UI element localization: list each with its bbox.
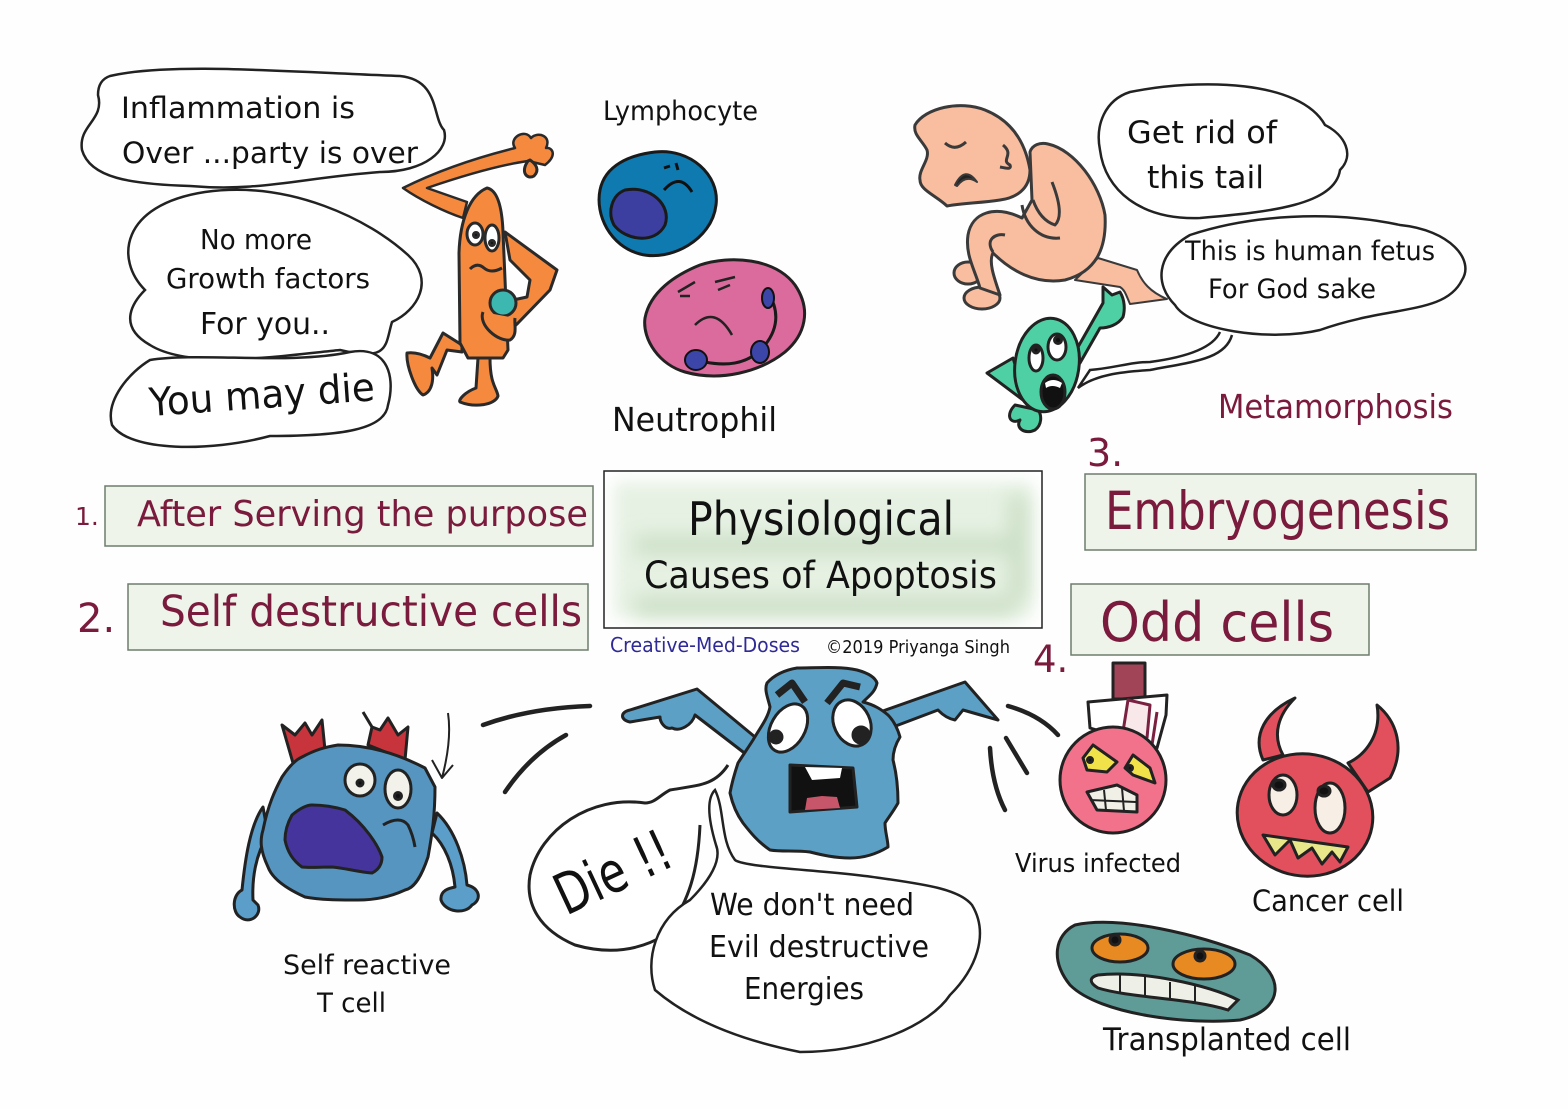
speech bubble: evil energies: We don't need — [710, 888, 914, 923]
speech bubble: growth factors — [128, 190, 422, 359]
speech bubble: growth factors: For you.. — [200, 307, 330, 342]
speech bubble: you may die: You may die — [147, 365, 376, 426]
character: virus infected cell — [1060, 663, 1167, 833]
speech bubble: growth factors: No more — [200, 223, 312, 256]
label: transplanted cell: Transplanted cell — [1102, 1022, 1351, 1058]
heading 4: odd cells — [1033, 584, 1369, 681]
character: self reactive T cell — [234, 712, 478, 920]
title box — [604, 471, 1042, 628]
label: self reactive T cell: Self reactive — [283, 950, 451, 981]
speech bubble: evil energies: Evil destructive — [709, 930, 929, 965]
speech bubble: human fetus — [1078, 216, 1465, 388]
heading 2: self destructive cells: 2. — [77, 596, 115, 642]
credit: creative-med-doses: Creative-Med-Doses — [610, 633, 800, 657]
speech bubble: get rid of this tail: Get rid of — [1127, 115, 1278, 151]
character: fetus — [915, 106, 1167, 309]
speech bubble: you may die — [111, 351, 391, 447]
heading 3: embryogenesis: 3. — [1087, 431, 1123, 475]
label: self reactive T cell: T cell — [316, 988, 386, 1019]
title text: Physiological — [688, 492, 954, 546]
speech bubble: growth factors: Growth factors — [166, 262, 370, 295]
label: self reactive T cell — [283, 950, 451, 1019]
credit: copyright: ©2019 Priyanga Singh — [826, 637, 1010, 658]
heading 4: odd cells: Odd cells — [1100, 591, 1334, 654]
character: transplanted cell — [1057, 922, 1275, 1021]
speech bubble: die: Die !! — [544, 817, 682, 929]
character: neutrophil — [645, 260, 805, 376]
character: cancer cell — [1227, 698, 1398, 887]
label: cancer cell: Cancer cell — [1252, 884, 1404, 918]
character: orange cell — [403, 134, 557, 405]
character: lymphocyte — [599, 152, 716, 256]
title box: Causes of Apoptosis — [644, 554, 997, 597]
speech bubble: inflammation — [82, 69, 445, 187]
character: green cell — [987, 287, 1124, 432]
speech bubble: die — [529, 765, 728, 950]
heading 1: after serving the purpose: After Serving the purpose — [137, 494, 588, 535]
speech bubble: get rid of this tail — [1099, 84, 1347, 218]
speech bubble: human fetus: This is human fetus — [1184, 236, 1435, 267]
motion strokes — [483, 706, 1058, 810]
speech bubble: inflammation: Inflammation is — [121, 91, 355, 125]
heading 1: after serving the purpose — [75, 486, 593, 546]
heading 2: self destructive cells — [77, 584, 588, 650]
heading 2: self destructive cells: Self destructive cells — [160, 587, 582, 637]
heading 1: after serving the purpose: 1. — [75, 502, 99, 531]
speech bubble: inflammation: Over ...party is over — [122, 136, 418, 170]
speech bubble: evil energies: Energies — [744, 972, 864, 1007]
character: central blue cell — [622, 668, 998, 858]
speech bubble: get rid of this tail: this tail — [1147, 160, 1264, 196]
speech bubble: evil energies — [651, 790, 980, 1052]
heading 3: embryogenesis — [1085, 431, 1476, 550]
heading 4: odd cells: 4. — [1033, 638, 1068, 681]
label: neutrophil: Neutrophil — [612, 400, 777, 439]
label: virus infected: Virus infected — [1015, 849, 1181, 879]
label: lymphocyte: Lymphocyte — [603, 96, 758, 127]
label: metamorphosis: Metamorphosis — [1218, 387, 1453, 426]
heading 3: embryogenesis: Embryogenesis — [1105, 481, 1450, 542]
speech bubble: human fetus: For God sake — [1208, 274, 1376, 305]
